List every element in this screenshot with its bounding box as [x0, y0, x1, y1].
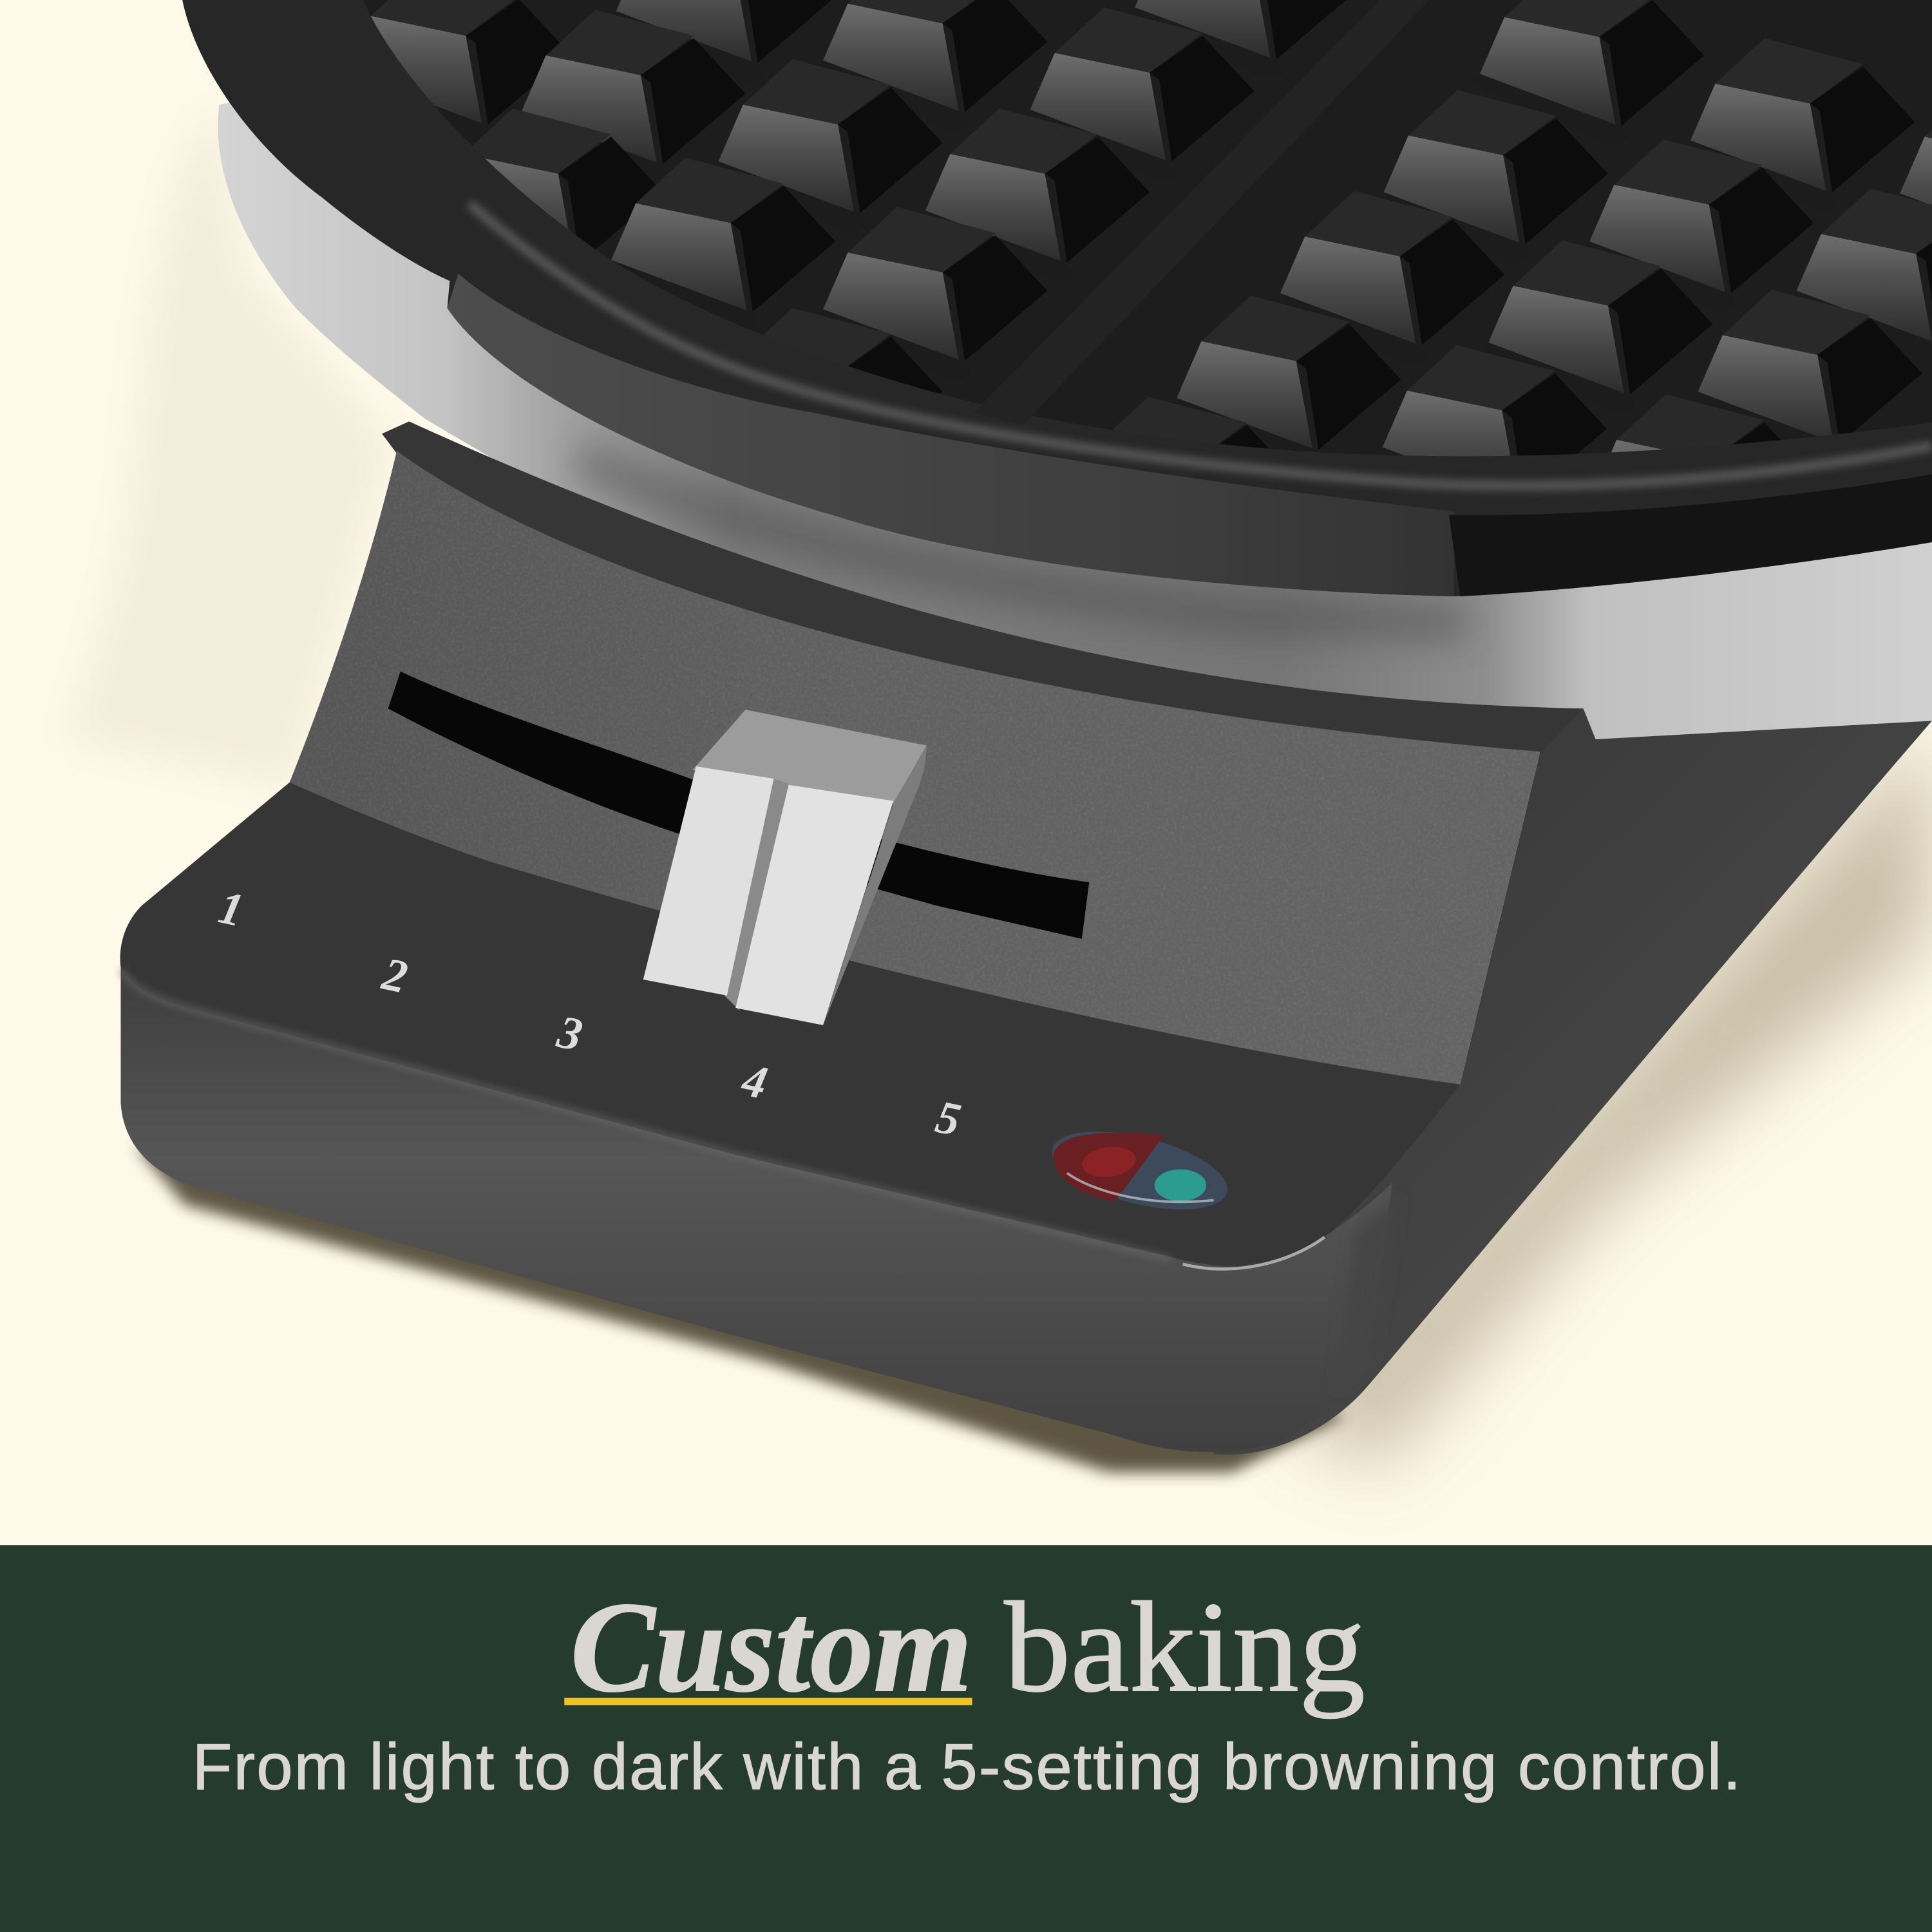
heading: Custom [571, 1576, 972, 1719]
waffle blocks [371, 0, 1932, 456]
rim right gloss [1449, 475, 1932, 596]
wall corner blend [1337, 1195, 1399, 1392]
control face panel [290, 451, 1540, 1084]
heading underline [564, 1698, 972, 1705]
heading: baking [1004, 1576, 1365, 1719]
browning slider knob [643, 710, 927, 1025]
setting 4: 4 [737, 1053, 772, 1109]
center divider [973, 0, 1435, 425]
setting 2: 2 [377, 947, 412, 1003]
light recess [1045, 1117, 1235, 1225]
shadow cast on the right [1282, 727, 1932, 1466]
knob right face [823, 746, 927, 1025]
teal glow [1155, 1170, 1206, 1201]
base front wall [121, 967, 1392, 1452]
band background [0, 1545, 1932, 1932]
indicator light [1045, 1117, 1235, 1225]
base right wall [1183, 708, 1932, 1455]
control face ridge [382, 421, 1584, 754]
subheading: From light to dark with a 5-setting browning control. [192, 1730, 1741, 1803]
steel shadow under rim [579, 456, 1466, 622]
stainless steel body [218, 74, 1932, 742]
waffle plate [182, 0, 1932, 596]
knob top face [692, 710, 927, 803]
cooking grid [363, 0, 1932, 456]
setting 5: 5 [931, 1090, 965, 1146]
panel surface grain [290, 451, 1540, 1084]
plate outer body [182, 0, 1932, 596]
red glow [1080, 1144, 1138, 1180]
shadow under front of base [135, 1146, 1343, 1472]
slider slot [388, 672, 1089, 939]
knob groove [724, 779, 788, 1010]
knob front left [643, 766, 774, 996]
control base [120, 421, 1932, 1455]
rim band [448, 274, 1454, 596]
soft shadow behind appliance [68, 105, 394, 788]
rim ridge [469, 204, 1932, 486]
base front edge highlight [121, 970, 1171, 1259]
background [0, 0, 1932, 1545]
lamp reflection [1067, 1173, 1214, 1202]
setting 3: 3 [553, 1005, 587, 1061]
browning setting numbers [214, 881, 965, 1146]
knob front right [735, 785, 893, 1025]
base top surface [120, 782, 1460, 1265]
caption band [0, 1545, 1932, 1932]
corner highlight [1183, 1237, 1325, 1269]
red lamp [1054, 1133, 1164, 1201]
setting 1: 1 [214, 881, 248, 936]
